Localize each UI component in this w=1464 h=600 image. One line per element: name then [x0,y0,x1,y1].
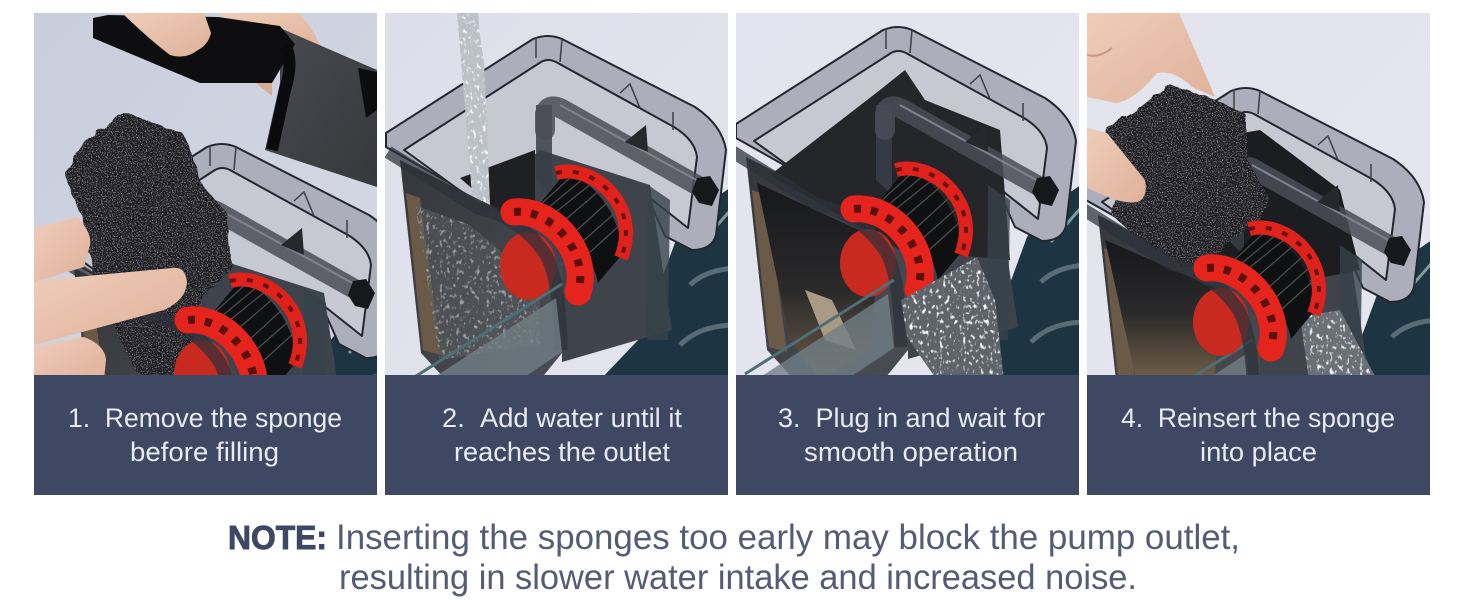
panel: step 4 photo [1087,13,1430,375]
icon: fingers gripping sponge [1087,13,1215,202]
note text: NOTE: [228,519,327,556]
icon: water from outlet [1302,310,1374,375]
note text: Inserting the sponges too early may block the pump outlet, [336,518,1240,557]
icon: sponge [70,118,226,370]
icon: pump spout in hand [93,13,377,187]
caption: step 1 [34,375,377,495]
caption: step 3: smooth operation [804,437,1018,467]
note text [228,518,1240,597]
panel: step 3 photo [728,13,1086,380]
caption: step 4: 4. Reinsert the sponge [1121,403,1395,433]
icon: waterfall from outlet [901,257,1004,380]
caption: step 1: 1. Remove the sponge [68,403,342,433]
caption: step 2: 2. Add water until it [442,403,682,433]
caption: step 3: 3. Plug in and wait for [778,403,1045,433]
icon: water stream from above [457,13,490,205]
note text: resulting in slower water intake and increased noise. [339,558,1137,597]
caption: step 2 [385,375,728,495]
panel: step 1 photo [34,13,377,375]
caption: step 1: before filling [130,437,279,467]
caption: step 3 [736,375,1079,495]
icon: sponge held above pump [1110,90,1264,262]
caption: step 4: into place [1200,437,1317,467]
caption: step 4 [1087,375,1430,495]
panel: step 2 photo [385,13,735,380]
icon: fingers holding sponge [34,217,187,380]
caption: step 2: reaches the outlet [454,437,670,467]
